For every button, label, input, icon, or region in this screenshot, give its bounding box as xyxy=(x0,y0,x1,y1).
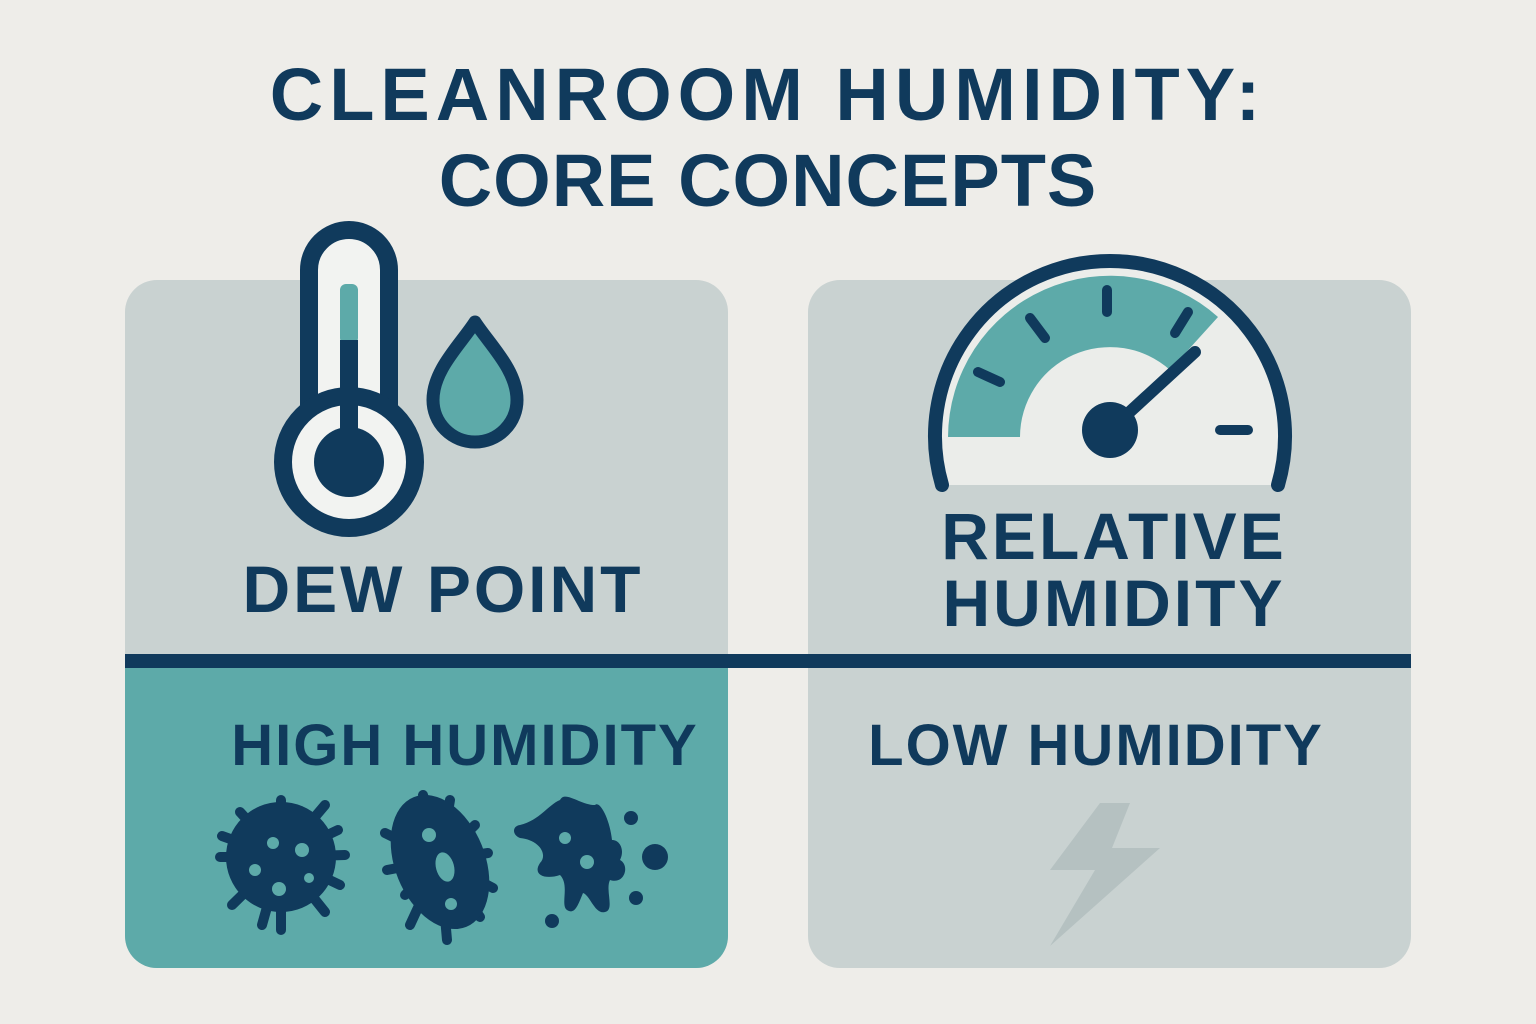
divider line xyxy=(125,654,1411,668)
heading: relative humidity: RELATIVE xyxy=(941,499,1287,573)
heading: high humidity: HIGH HUMIDITY xyxy=(231,713,699,778)
title: CORE CONCEPTS xyxy=(439,139,1097,222)
heading: low humidity: LOW HUMIDITY xyxy=(868,713,1324,778)
heading: relative humidity: HUMIDITY xyxy=(943,566,1285,640)
panel: dew point xyxy=(125,280,728,968)
title xyxy=(270,53,1266,222)
icon: water drop xyxy=(433,322,517,442)
panel: relative humidity xyxy=(808,280,1411,968)
title: CLEANROOM HUMIDITY: xyxy=(270,53,1266,136)
heading: relative humidity xyxy=(941,499,1287,640)
icon: gauge xyxy=(935,261,1285,485)
icon: lightning bolt xyxy=(1050,803,1160,946)
icon: thermometer xyxy=(283,230,415,528)
heading: dew point: DEW POINT xyxy=(242,552,644,626)
icon: microbes xyxy=(220,780,668,944)
